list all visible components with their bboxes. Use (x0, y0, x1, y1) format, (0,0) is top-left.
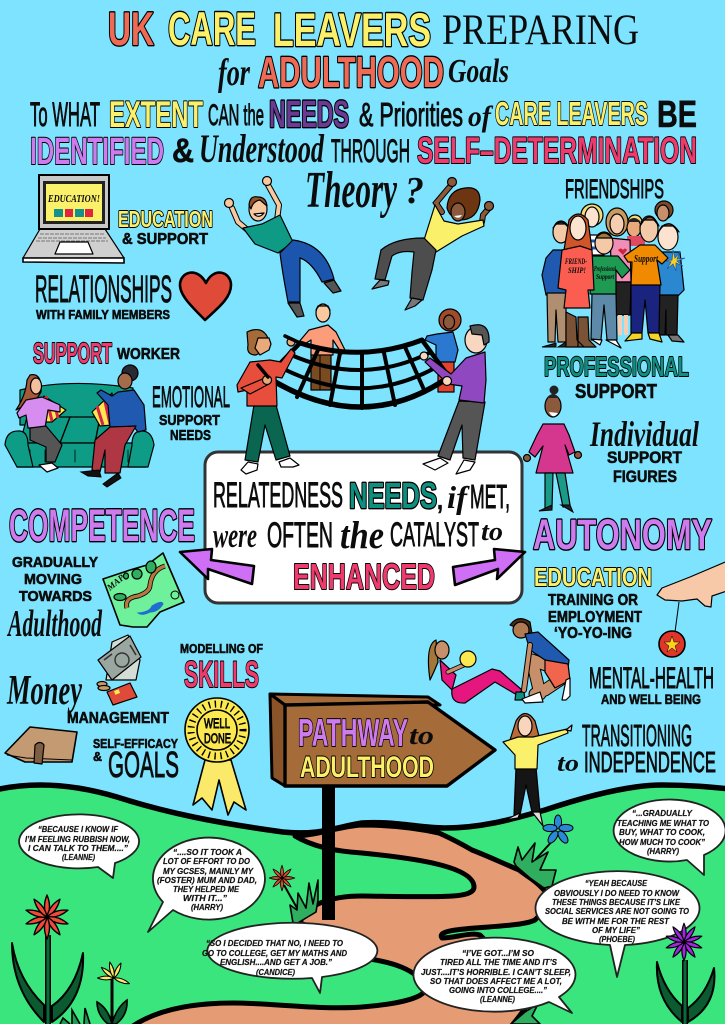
relatedness message box: ENHANCED (293, 556, 435, 597)
relatedness message box: , (437, 485, 443, 515)
grass by lower bubble (511, 1004, 540, 1024)
friend: man in orange tee (624, 216, 668, 342)
friend: man in green top: Support (596, 273, 615, 281)
speech bubble: Harry (GCSEs): WITH IT...” (183, 894, 228, 903)
icon: map: MAP (104, 572, 127, 593)
label: education and support: EDUCATION (118, 206, 213, 232)
label: modelling of skills: SKILLS (184, 654, 259, 695)
research question heading: IDENTIFIED (30, 131, 164, 173)
speech bubble: Candice: “SO I DECIDED THAT NO, I NEED TO (206, 939, 344, 948)
heading: competence: COMPETENCE (9, 500, 195, 551)
icon: map (103, 553, 184, 627)
speech bubble: Leanne (rubbish): “BECAUSE I KNOW IF (38, 825, 119, 834)
illustration: woman in yellow top (503, 714, 572, 826)
relatedness message box: if (447, 479, 470, 515)
icon: banknotes, coins and bank card (97, 635, 141, 705)
label: self-efficacy and goals: & (93, 749, 102, 764)
text: RELATIONSHIPS (35, 269, 172, 311)
woman doing sit-ups (428, 640, 525, 703)
label: education, training or employment yo-yo-ing: EMPLOYMENT (548, 609, 642, 626)
research question heading: THROUGH (331, 133, 410, 169)
woman on sofa (16, 375, 62, 472)
label: education, training or employment yo-yo-ing: ‘YO-YO-ING (554, 625, 632, 642)
speech bubble: Leanne (tired): TIRED ALL THE TIME AND IT’S (440, 958, 558, 967)
speech bubble: Candice: ENGLISH....AND GET A JOB.” (220, 958, 333, 967)
illustration: two people on a sofa (5, 365, 154, 487)
friend: man in right blue top (657, 224, 685, 342)
illustration: sit-ups with trainer (428, 619, 570, 703)
icon: heart (180, 273, 231, 320)
relatedness message box: were (213, 516, 257, 555)
speech bubble: Phoebe: (PHOEBE) (599, 935, 635, 944)
speech bubble: Harry (cooking): HOW MUCH TO COOK” (619, 838, 706, 847)
speech bubble: Harry (cooking): TEACHING ME WHAT TO (617, 819, 710, 828)
illustration: man in purple holding the net (420, 325, 489, 474)
small man in peach top (298, 304, 346, 390)
friend: man in green top: Professional (594, 265, 616, 273)
speech bubble: Harry (cooking): “...GRADUALLY (632, 809, 693, 818)
label: emotional support needs: NEEDS (170, 427, 211, 444)
label: gradually moving towards adulthood (7, 554, 103, 645)
speech bubble: Phoebe (535, 871, 700, 977)
flower: small orange with grass (269, 865, 318, 924)
speech bubble: Leanne (rubbish): I’M FEELING RUBBISH NOW, (25, 835, 130, 844)
icon: well done rosette: DONE (204, 730, 231, 746)
speech bubble: Harry (GCSEs): THEY HELPED ME (173, 885, 239, 894)
title: CARE (168, 2, 256, 55)
title: UK (108, 2, 154, 55)
relatedness message box: CATALYST (390, 516, 479, 554)
speech bubble: Leanne (rubbish) (19, 814, 139, 878)
icon: laptop: EDUCATION! (47, 193, 100, 205)
striped pillow left (38, 396, 66, 422)
speech bubble: Harry (GCSEs) (148, 838, 265, 932)
illustration: woman in pink dress (524, 386, 582, 512)
relatedness message box: to (481, 517, 503, 546)
small woman in blue top (425, 309, 461, 392)
illustration: woman holding the net (237, 330, 300, 474)
hill landscape (0, 785, 725, 1024)
label: emotional support needs: SUPPORT (159, 412, 220, 429)
label: money management: Money (6, 668, 82, 714)
relatedness message box (205, 452, 522, 603)
label: emotional support needs (152, 381, 230, 444)
title (108, 2, 639, 97)
label: self-efficacy and goals: SELF-EFFICACY (93, 736, 178, 751)
speech bubble: Harry (GCSEs): (FOSTER) MUM AND DAD, (157, 876, 257, 885)
label: gradually moving towards adulthood: GRADUALLY (12, 554, 98, 571)
research question heading: of (468, 100, 494, 133)
speech bubble: Harry (GCSEs): LOT OF EFFORT TO DO (163, 857, 251, 866)
research question heading: CAN the (208, 99, 264, 132)
label: self-efficacy and goals: GOALS (108, 744, 179, 785)
label: gradually moving towards adulthood: Adulthood (7, 603, 103, 645)
speech bubble: Harry (cooking) (614, 800, 725, 875)
speech bubble: Phoebe: OBVIOUSLY I DO NEED TO KNOW (554, 889, 680, 898)
flower: large red (12, 895, 83, 1024)
illustration: small figures behind the net (298, 304, 461, 392)
friend: man in blue jacket (542, 221, 570, 347)
research question heading: & Priorities (359, 96, 463, 133)
friend: woman in coral dress: FRIEND- (564, 257, 587, 266)
label: education, training or employment yo-yo-ing (534, 562, 652, 642)
research question heading: Theory (305, 162, 398, 219)
label: mental health and well being (589, 662, 714, 707)
speech bubble: Phoebe: OF MY LIFE” (592, 926, 641, 935)
signpost: pathway to adulthood: ADULTHOOD (300, 751, 434, 784)
speech bubble: Leanne (tired): JUST....IT’S HORRIBLE. I CAN’T SLEEP, (421, 968, 571, 977)
speech bubble: Harry (cooking): (HARRY) (647, 847, 679, 856)
title: ADULTHOOD (258, 48, 444, 97)
title: for (218, 52, 251, 94)
flower: blue with grass (514, 815, 573, 888)
title: LEAVERS (273, 3, 431, 56)
research question heading: ? (405, 170, 424, 212)
speech bubble: Candice (202, 923, 377, 993)
label: education, training or employment yo-yo-ing: EDUCATION (534, 562, 652, 592)
label: support worker: WORKER (117, 346, 180, 363)
research question heading: EXTENT (109, 94, 203, 135)
icon: hand with yo-yo (657, 560, 725, 657)
label: gradually moving towards adulthood: TOWARDS (19, 588, 92, 605)
label: education and support (118, 206, 213, 248)
icon: laptop (23, 175, 124, 263)
kneeling trainer (510, 619, 570, 703)
speech bubble: Harry (GCSEs): (HARRY) (191, 903, 223, 912)
signpost: pathway to adulthood: PATHWAY (298, 712, 408, 755)
speech bubble: Harry (cooking): BUY, WHAT TO COOK, (619, 828, 705, 837)
illustration: falling man in green top (224, 176, 341, 317)
speech bubble: Phoebe: THESE THINGS BECAUSE IT’S LIKE (552, 898, 680, 907)
research question heading: BE (657, 94, 697, 136)
friend: woman in coral dress (558, 214, 596, 347)
speech bubble: Phoebe: BE WITH ME FOR THE REST (562, 917, 670, 926)
relatedness message box: MET, (470, 478, 510, 515)
flower: yellow (60, 962, 130, 1024)
text: EMOTIONAL (152, 381, 230, 414)
friend: man in green top (590, 232, 630, 348)
icon: well done rosette (185, 698, 249, 815)
winding path (130, 825, 547, 1024)
man on sofa (81, 365, 146, 487)
label: gradually moving towards adulthood: MOVING (24, 571, 82, 588)
label: self-efficacy and goals (93, 736, 179, 785)
speech bubble: Leanne (rubbish): (LEANNE) (62, 853, 95, 862)
research question heading: NEEDS (269, 94, 349, 136)
signpost: pathway to adulthood (270, 694, 495, 920)
speech bubble: Leanne (rubbish): I CAN TALK TO THEM....” (28, 844, 129, 853)
research question heading (30, 94, 697, 219)
speech bubble: Candice: GO TO COLLEGE, GET MY MATHS AND (202, 949, 347, 958)
label: relationships with family members: WITH FAMILY MEMBERS (36, 307, 170, 322)
relatedness message box: the (340, 514, 384, 557)
label: education, training or employment yo-yo-ing: TRAINING OR (548, 592, 638, 609)
relatedness message box: NEEDS (349, 475, 437, 516)
relatedness message box: OFTEN (267, 516, 333, 555)
speech bubble: Leanne (tired): GOING INTO COLLEGE....” (449, 986, 548, 995)
label: modelling of skills (180, 641, 263, 695)
label: modelling of skills: MODELLING OF (180, 641, 263, 656)
label: professional support (544, 351, 689, 403)
research question heading: Understood (199, 126, 325, 171)
label: money management (6, 668, 169, 727)
icon: well done rosette: WELL (204, 715, 230, 731)
striped pillow right (92, 393, 113, 426)
label: individual support figures: SUPPORT (607, 448, 683, 467)
speech bubble: Harry (GCSEs): “....SO IT TOOK A (173, 848, 242, 857)
friend: woman in coral dress: SHIP! (568, 266, 586, 275)
speech bubble: Leanne (tired): “I’VE GOT...I’M SO (462, 949, 535, 958)
speech bubble: Leanne (tired) (413, 938, 575, 1013)
flower: purple (657, 923, 714, 1024)
arrow: towards competence (180, 549, 254, 584)
illustration: falling woman in yellow top (372, 178, 494, 310)
research question heading: To WHAT (30, 96, 100, 134)
icon: wallet (5, 727, 77, 764)
speech bubble: Harry (GCSEs): MY GCSES, MAINLY MY (163, 867, 254, 876)
label: support worker: SUPPORT (33, 338, 112, 370)
research question heading: & (172, 132, 194, 170)
label: transitioning to independence (557, 718, 716, 779)
friend: man in orange tee: Support (634, 254, 659, 265)
title: Goals (448, 53, 509, 90)
far back friends (581, 201, 673, 335)
label: money management: MANAGEMENT (67, 710, 169, 727)
speech bubble: Phoebe: SOCIAL SERVICES ARE NOT GOING TO (545, 907, 690, 916)
label: professional support: SUPPORT (575, 381, 657, 403)
label: relationships with family members (35, 269, 172, 322)
cargo net (267, 340, 449, 408)
relatedness message box: RELATEDNESS (213, 476, 343, 515)
label: transitioning to independence: to (557, 751, 579, 777)
illustration: group of friends (542, 201, 685, 348)
label: education and support: & SUPPORT (122, 231, 208, 248)
signpost: pathway to adulthood: to (409, 721, 434, 750)
label: mental health and well being: AND WELL BEING (601, 691, 701, 707)
label: individual support figures (589, 414, 699, 486)
label: individual support figures: FIGURES (613, 467, 677, 486)
speech bubble: Candice: (CANDICE) (256, 968, 295, 977)
arrow: towards autonomy (453, 549, 525, 585)
speech bubble: Leanne (tired): (LEANNE) (480, 995, 515, 1004)
speech bubble: Phoebe: “YEAH BECAUSE (585, 879, 647, 888)
speech bubble: Leanne (tired): SO THAT DOES AFFECT ME A LOT, (430, 977, 562, 986)
title: PREPARING (442, 7, 639, 54)
